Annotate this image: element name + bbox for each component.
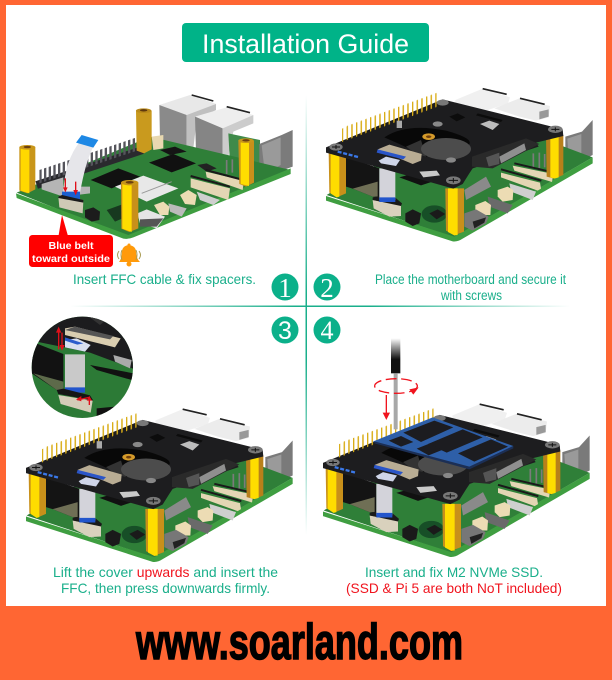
step badge 4: 4: [320, 316, 334, 345]
horizontal divider: [70, 306, 570, 307]
step badge 1: [272, 273, 298, 303]
step 3 caption: FFC, then press downwards firmly.: [61, 580, 270, 596]
step 2 caption: Place the motherboard and secure it: [375, 272, 566, 287]
panel: step 3 illustration: [26, 409, 293, 562]
step 2 caption: with screws: [440, 288, 502, 303]
callout: blue belt: Blue belt: [48, 240, 94, 252]
panel: step 1 illustration: [16, 95, 293, 239]
step badge 1: 1: [278, 273, 292, 303]
step 3 caption: [53, 564, 278, 596]
vertical divider: [306, 95, 307, 535]
panel: step 2 illustration: [326, 89, 593, 241]
step badge 3: 3: [278, 317, 292, 345]
title: [182, 23, 429, 62]
panel: step 4 illustration: [323, 404, 590, 557]
step badge 3: [272, 316, 298, 345]
step 3 caption: Lift the cover upwards and insert the: [53, 564, 278, 580]
step 4 caption: Insert and fix M2 NVMe SSD.: [365, 564, 543, 580]
step badge 4: [314, 316, 340, 345]
step 4 caption: (SSD & Pi 5 are both NoT included): [346, 580, 562, 596]
step 2 caption: [375, 272, 566, 303]
inset: FFC close-up: [30, 315, 137, 420]
step badge 2: 2: [320, 273, 334, 303]
callout: blue belt: [29, 215, 113, 267]
title: Installation Guide: [202, 29, 409, 59]
icon: bell: [118, 244, 140, 266]
step 1 caption: Insert FFC cable & fix spacers.: [73, 271, 256, 287]
callout: blue belt: toward outside: [32, 253, 110, 265]
SSD and screwdriver: [373, 338, 513, 469]
footer website: www.soarland.com: [135, 614, 463, 670]
step badge 2: [314, 273, 340, 303]
step 4 caption: [346, 564, 562, 596]
